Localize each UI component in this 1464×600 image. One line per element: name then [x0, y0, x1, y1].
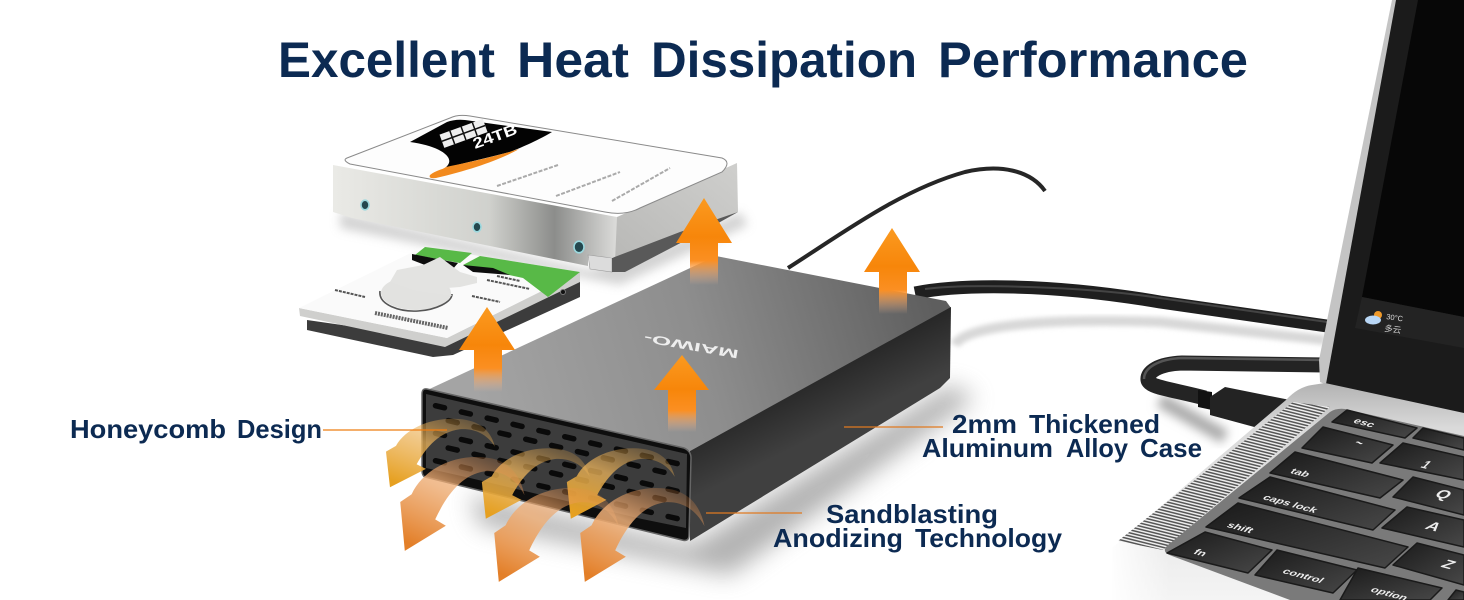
- disc graphic: [381, 276, 451, 310]
- drive underside: [307, 280, 580, 357]
- black label area: [410, 120, 552, 168]
- black label bars: [412, 254, 458, 270]
- logo glyph block: [440, 119, 488, 148]
- cable: thin rear cable: [788, 169, 1045, 268]
- floor shadows: [340, 212, 1325, 575]
- key legends: tab: [1287, 467, 1313, 479]
- callout: sandblasting: [706, 499, 1063, 553]
- key legends: Q: [1431, 488, 1455, 502]
- title: [278, 32, 1248, 88]
- key legends: Z: [1437, 558, 1459, 572]
- weather widget: 30°C: [1386, 312, 1404, 323]
- laptop bezel: [1326, 0, 1464, 414]
- callout: honeycomb design: [70, 414, 447, 444]
- SATA connector: [612, 212, 738, 272]
- heat arrow: lower right: [580, 488, 704, 582]
- weather widget: 多云: [1384, 323, 1402, 335]
- upward heat arrows: [459, 198, 920, 432]
- screen weather strip: [1355, 297, 1464, 348]
- heat arrow: upper left: [386, 419, 495, 487]
- mounting holes: [361, 200, 584, 253]
- label text marks: [335, 276, 530, 302]
- callout: aluminum case: Aluminum: [922, 433, 1053, 463]
- base edge fade: [1108, 535, 1172, 600]
- enclosure front panel: [422, 389, 691, 540]
- barcode and marks: [497, 165, 670, 201]
- heat arrow: lid centre: [654, 355, 709, 432]
- key legends: ~: [1350, 436, 1369, 449]
- callout: sandblasting: Sandblasting: [826, 499, 998, 529]
- heat arrow: small drive: [459, 307, 515, 392]
- callout: aluminum case: Thickened: [1029, 409, 1160, 439]
- enclosure: [422, 256, 951, 541]
- key legends: [1191, 417, 1459, 600]
- drive top label: [299, 247, 580, 338]
- heat arrow: lower centre: [494, 488, 618, 582]
- cable: long cable to laptop: [915, 286, 1327, 326]
- callout: aluminum case: Alloy: [1066, 433, 1129, 463]
- large 3.5-inch hard drive: [333, 115, 738, 272]
- key legends: shift: [1224, 521, 1256, 535]
- callout: sandblasting: Technology: [915, 523, 1063, 553]
- heat arrow: lid right: [864, 228, 920, 314]
- orange swoosh: [430, 149, 519, 178]
- cable: USB-C loop and connector: [1144, 358, 1325, 428]
- cover plate: [390, 257, 477, 296]
- barcode: [375, 313, 448, 328]
- callout: sandblasting: Anodizing: [773, 523, 903, 553]
- key legends: control: [1280, 567, 1326, 585]
- downward curved heat arrows: [386, 419, 704, 582]
- drive top label: [345, 115, 727, 213]
- brand logo: MAIWO-: [643, 331, 740, 361]
- title: Performance: [938, 32, 1248, 88]
- key legends: A: [1421, 520, 1445, 534]
- title: Excellent: [278, 32, 495, 88]
- drive front side: [333, 165, 617, 266]
- callout: honeycomb design: Honeycomb: [70, 414, 226, 444]
- green label strip: [415, 247, 472, 263]
- disc crescent: [380, 291, 452, 311]
- speaker grill: [1118, 402, 1330, 550]
- title: Heat: [517, 32, 629, 88]
- laptop base: [1112, 383, 1464, 600]
- drive right side: [615, 163, 738, 262]
- laptop screen: [1362, 0, 1464, 317]
- callout: aluminum case: 2mm: [952, 409, 1017, 439]
- keys: [1167, 410, 1464, 600]
- heat arrow: large drive: [676, 198, 732, 285]
- capacity text: 24TB: [471, 121, 520, 153]
- callout: aluminum case: Case: [1140, 433, 1202, 463]
- heat arrow: upper centre: [482, 448, 590, 519]
- key legends: caps lock: [1260, 493, 1321, 515]
- laptop: [1108, 0, 1464, 600]
- weather widget: [1365, 311, 1404, 335]
- enclosure side panel: [690, 307, 951, 541]
- heat arrow: lower left: [400, 457, 524, 551]
- screw holes: [560, 290, 566, 294]
- front panel face: [426, 394, 687, 528]
- drive bracket: [588, 255, 612, 272]
- enclosure top lid: [423, 256, 951, 451]
- drive rim: [299, 272, 580, 347]
- laptop lid edge: [1319, 0, 1397, 385]
- keyboard well: [1165, 409, 1464, 600]
- heat arrow: upper right: [567, 448, 675, 519]
- key legends: esc: [1351, 417, 1377, 429]
- callout: aluminum case: [844, 409, 1202, 463]
- title: Dissipation: [651, 32, 917, 88]
- honeycomb slots: [436, 406, 677, 519]
- key legends: fn: [1191, 548, 1209, 558]
- callout: honeycomb design: Design: [237, 414, 322, 444]
- 2.5-inch hard drive: [299, 247, 580, 357]
- key legends: 1: [1418, 458, 1435, 471]
